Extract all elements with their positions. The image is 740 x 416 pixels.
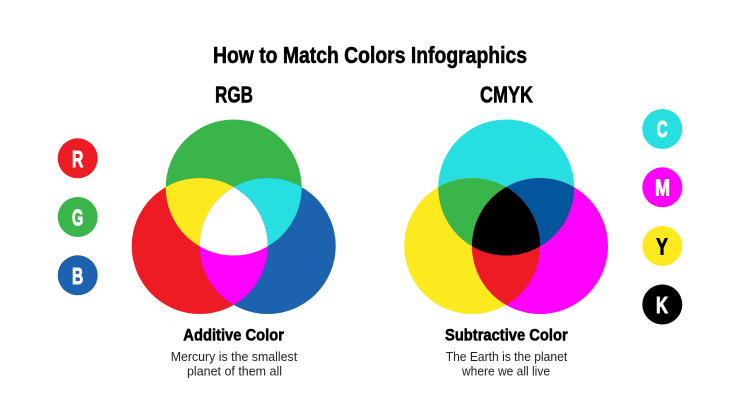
text: additive description: planet of them all (187, 364, 282, 378)
badge: Y: Y (656, 234, 668, 260)
diagram: RGB additive venn (132, 120, 336, 314)
heading: RGB: RGB (215, 82, 253, 108)
badge: G: G (72, 204, 83, 230)
text: subtractive description: where we all live (461, 364, 550, 378)
heading: CMYK: CMYK (480, 82, 533, 108)
badge: Y (642, 226, 682, 266)
badge: C (642, 109, 682, 149)
heading: Subtractive Color: Subtractive Color (445, 326, 568, 345)
diagram: CMYK subtractive venn (404, 120, 608, 314)
badge: M: M (655, 175, 670, 201)
text: additive description: Mercury is the smallest (171, 350, 298, 364)
text: subtractive description: The Earth is the planet (446, 350, 568, 364)
heading: Additive Color: Additive Color (183, 326, 284, 345)
badge: R: R (72, 146, 84, 172)
badge: C: C (657, 116, 668, 142)
badge: R (58, 138, 98, 178)
text: subtractive description (446, 350, 568, 378)
badge: K: K (656, 292, 668, 318)
badge: G (58, 197, 98, 237)
badge: M (642, 167, 682, 207)
badge: K (642, 284, 682, 324)
text: additive description (171, 350, 298, 378)
badge: B (58, 255, 98, 295)
badge: B: B (72, 263, 83, 289)
title: How to Match Colors Infographics (213, 42, 527, 68)
